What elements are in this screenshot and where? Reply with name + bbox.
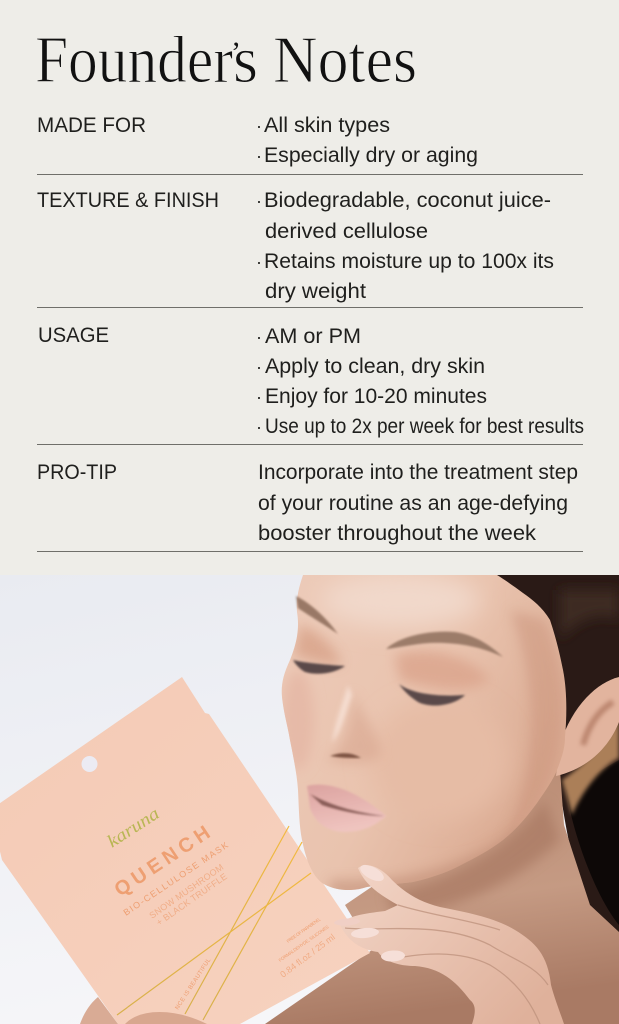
lips	[307, 785, 386, 832]
eyebrow: right	[386, 632, 503, 657]
label: made for: MADE FOR	[37, 113, 146, 137]
text: usage list: ·	[256, 387, 262, 407]
ear	[556, 677, 619, 776]
face	[282, 572, 566, 896]
gold lines	[117, 826, 311, 1020]
top panel background	[0, 0, 619, 575]
title: Notes	[273, 23, 417, 97]
text: made for list: ·	[256, 116, 262, 136]
text: usage list: Apply to clean, dry skin	[265, 354, 485, 378]
text: usage list: Enjoy for 10-20 minutes	[265, 384, 487, 408]
text: made for list	[256, 113, 478, 167]
text: texture list	[256, 188, 554, 303]
text: pro-tip body: Incorporate into the treatment step	[258, 460, 578, 484]
text: made for list: All skin types	[264, 113, 390, 137]
shadow under jaw	[386, 806, 559, 908]
photo: model holding mask packet	[0, 572, 619, 1024]
packet brand: karuna	[103, 803, 163, 851]
nose shading	[332, 704, 378, 764]
row: texture and finish	[37, 188, 554, 303]
row: usage	[38, 323, 584, 438]
eye socket shading	[395, 651, 490, 689]
packet product name: QUENCH	[111, 822, 214, 901]
finger creases	[345, 905, 548, 1024]
title: ’	[231, 36, 241, 69]
title	[35, 23, 417, 97]
text: pro-tip body: of your routine as an age-defying	[258, 491, 568, 515]
text: texture list: derived cellulose	[265, 219, 428, 243]
text: usage list: AM or PM	[265, 324, 361, 348]
packet fine print: 0.84 fl.oz / 25 ml	[278, 932, 337, 980]
text: pro-tip body	[258, 460, 578, 545]
text: usage list: ·	[256, 327, 262, 347]
label: usage: USAGE	[38, 323, 109, 347]
eye: right	[399, 684, 465, 706]
text: texture list: ·	[256, 191, 262, 211]
shoulder and thumb at lower left	[80, 997, 207, 1024]
nose highlight	[332, 685, 352, 742]
title: Founder	[35, 23, 233, 97]
text: usage list: Use up to 2x per week for best results	[265, 414, 584, 438]
text: texture list: dry weight	[265, 279, 366, 303]
label: pro-tip: PRO-TIP	[37, 460, 117, 484]
text: usage list	[256, 324, 584, 438]
packet subtitle: + BLACK TRUFFLE	[154, 871, 229, 928]
nails	[347, 864, 405, 962]
text: made for list: Especially dry or aging	[264, 143, 478, 167]
nostril	[330, 753, 361, 758]
row: pro-tip	[37, 460, 578, 545]
face shading	[320, 572, 480, 628]
neck and shoulder	[265, 770, 619, 1024]
packet fine print: FREE OF PARABENS,	[286, 917, 321, 944]
eyebrow: left	[296, 596, 338, 634]
eye: left	[293, 660, 345, 674]
mask packet	[0, 677, 370, 1024]
packet subtitle: BIO-CELLULOSE MASK	[122, 840, 230, 918]
packet tagline: NCE IS BEAUTIFUL	[175, 957, 213, 1011]
packet fine print: FORMALDEHYDE, SILICONES	[278, 924, 330, 963]
text: texture list: ·	[256, 252, 262, 272]
row: made for	[37, 113, 478, 167]
hand and fingers	[334, 862, 564, 1024]
label: texture and finish: TEXTURE & FINISH	[37, 188, 219, 212]
text: texture list: Biodegradable, coconut juice-	[264, 188, 551, 212]
text: usage list: ·	[256, 357, 262, 377]
text: made for list: ·	[256, 146, 262, 166]
packet hang hole	[82, 756, 98, 772]
text: pro-tip body: booster throughout the week	[258, 521, 536, 545]
text: texture list: Retains moisture up to 100x its	[264, 249, 554, 273]
title: s	[233, 23, 258, 97]
hair	[490, 575, 619, 935]
text: usage list: ·	[256, 417, 262, 437]
packet subtitle: SNOW MUSHROOM	[147, 862, 225, 921]
